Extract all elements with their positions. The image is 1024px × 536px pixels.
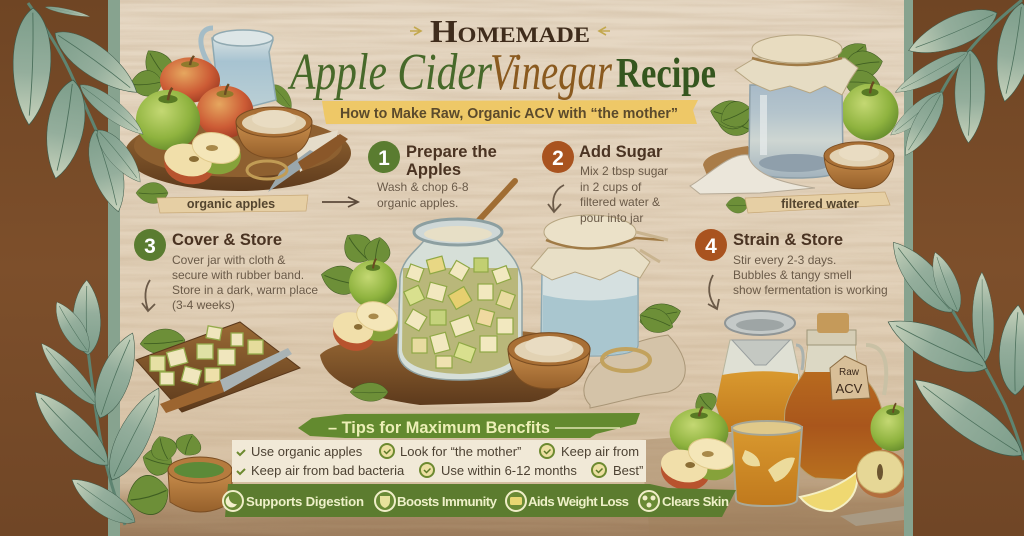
step 4: Stir every 2-3 days. [733, 253, 836, 267]
title: Apple Cider [288, 44, 493, 101]
illustration: small herb bowl and leaves [127, 434, 232, 515]
tips heading brush band [298, 413, 640, 438]
step 3: 3 [144, 235, 156, 258]
tips checklist: Use within 6-12 months [441, 463, 577, 478]
illustration: strained vinegar jars, apples, glass and lemon: Raw [839, 367, 860, 378]
sage border [108, 0, 913, 536]
tips checklist [232, 440, 646, 482]
label: filtered water: filtered water [781, 197, 859, 211]
step 2: 2 [552, 147, 564, 170]
illustration: strained vinegar jars, apples, glass and lemon: ACV [836, 381, 863, 396]
step 4: show fermentation is working [733, 283, 888, 297]
illustration: apples, pitcher and bowl on board [125, 28, 351, 203]
step 4 [695, 229, 888, 309]
foliage: top right branch [885, 0, 1024, 161]
step 3: secure with rubber band. [172, 268, 304, 282]
step 3: Cover & Store [172, 231, 282, 249]
tips heading brush band: – Tips for Maximum Bencfits [328, 419, 550, 437]
illustration: jar with cloth, apple and bowl [690, 35, 898, 213]
title: Vinegar [490, 44, 613, 101]
step 4: Bubbles & tangy smell [733, 268, 852, 282]
benefits green band: Clears Skin [662, 494, 729, 509]
illustration: centre board and apple jar [318, 181, 685, 408]
step 3: Store in a dark, warm place [172, 283, 318, 297]
title [288, 21, 716, 100]
tips checklist: Best” [613, 463, 643, 478]
illustration: strained vinegar jars, apples, glass and lemon [657, 311, 916, 526]
step 1: 1 [378, 147, 390, 170]
tips checklist: Keep air from bad bacteria [251, 463, 405, 478]
step 1: Wash & chop 6-8 [377, 180, 469, 194]
label: organic apples: organic apples [187, 197, 275, 211]
step 3 [134, 229, 318, 312]
tips checklist: Keep air from [561, 444, 639, 459]
step 2: filtered water & [580, 195, 660, 209]
label: filtered water [745, 192, 890, 213]
wooden table, lower right [642, 433, 904, 508]
step 2: pour into jar [580, 211, 643, 225]
step 2 [542, 141, 668, 225]
step 1: organic apples. [377, 196, 458, 210]
step 3: (3-4 weeks) [172, 298, 235, 312]
wood panel [120, 0, 904, 536]
illustration: chopping board and knife [136, 322, 300, 413]
benefits green band: Aids Weight Loss [528, 494, 629, 509]
arrow to step 1 [322, 197, 358, 207]
step 3: Cover jar with cloth & [172, 253, 285, 267]
subtitle banner: How to Make Raw, Organic ACV with “the mother” [340, 106, 678, 122]
label: organic apples [157, 195, 308, 213]
title: Homemade [430, 13, 590, 49]
foliage: bottom right branch [881, 233, 1024, 470]
step 1 [368, 141, 497, 210]
benefits green band: Boosts Immunity [397, 494, 498, 509]
step 2: Add Sugar [579, 143, 663, 161]
step 4: 4 [705, 235, 717, 258]
step 1: Prepare the [406, 143, 497, 161]
tips checklist: Look for “the mother” [400, 444, 521, 459]
step 4: Strain & Store [733, 231, 843, 249]
foliage: top left branch [11, 3, 149, 216]
subtitle banner [322, 100, 698, 124]
benefits green band [223, 484, 736, 517]
step 2: Mix 2 tbsp sugar [580, 164, 668, 178]
step 1: Apples [406, 161, 461, 179]
step 2: in 2 cups of [580, 180, 642, 194]
title: Recipe [616, 51, 716, 97]
tips checklist: Use organic apples [251, 444, 363, 459]
foliage: bottom left branch [24, 280, 172, 532]
benefits green band: Supports Digestion [246, 494, 364, 509]
